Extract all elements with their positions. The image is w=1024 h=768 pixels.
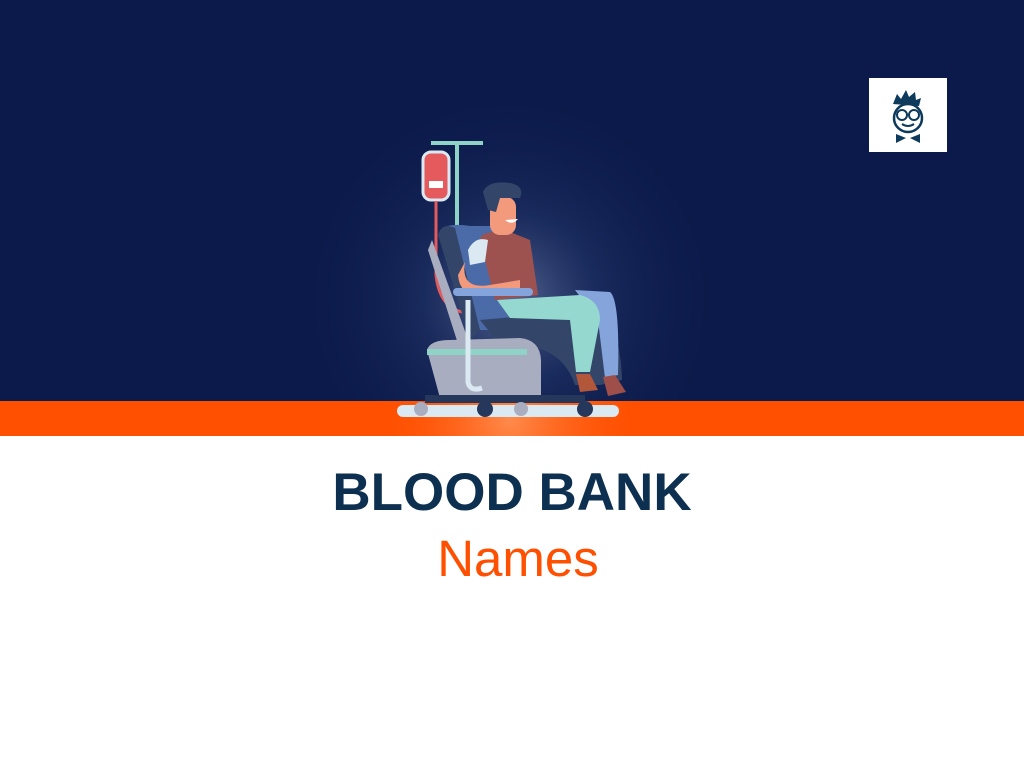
blood bag xyxy=(423,152,449,200)
subtitle: Names xyxy=(437,530,599,587)
stand xyxy=(468,300,482,389)
title: BLOOD BANK xyxy=(332,463,692,522)
illustration: blood donor in chair xyxy=(397,143,626,417)
tube xyxy=(436,201,492,313)
chair back xyxy=(440,225,520,330)
hero banner xyxy=(0,0,1024,436)
person xyxy=(575,290,618,378)
chair base xyxy=(427,338,541,398)
logo xyxy=(869,78,947,152)
iv pole xyxy=(431,143,483,228)
chair seat xyxy=(480,310,622,385)
